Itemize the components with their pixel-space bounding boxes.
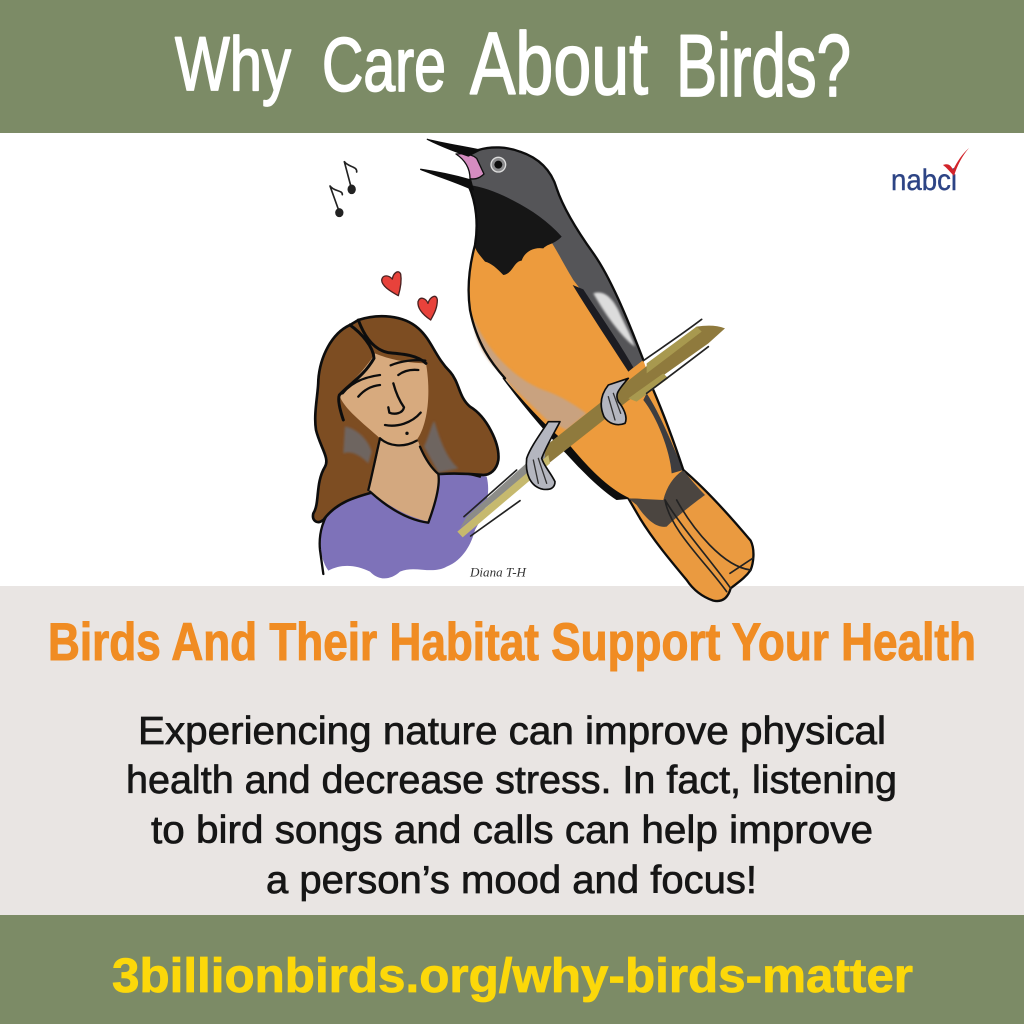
body text: health and decrease stress. In fact, listening (126, 759, 897, 802)
body text: a person’s mood and focus! (266, 859, 757, 902)
tail (628, 470, 753, 601)
eye (491, 157, 506, 172)
facial features (343, 360, 425, 445)
undertail black band (503, 378, 628, 499)
logo: nabci (891, 148, 969, 197)
illustration: woman listening to singing oriole (313, 139, 753, 601)
oriole bird (421, 139, 753, 601)
wing streak (573, 285, 633, 372)
upper beak (427, 139, 480, 156)
body outline (468, 147, 683, 470)
header band (0, 0, 1024, 133)
artist signature: Diana T-H (469, 566, 527, 580)
neck (368, 438, 439, 522)
title: About (470, 14, 648, 113)
shirt outline (320, 473, 480, 574)
wing white patch (593, 292, 635, 347)
shirt (321, 474, 488, 578)
title: Birds? (676, 16, 851, 115)
back grey (467, 148, 643, 372)
woman (313, 316, 498, 578)
title (175, 14, 851, 115)
face (339, 353, 428, 445)
body text: to bird songs and calls can help improve (151, 809, 873, 852)
logo checkmark (943, 148, 969, 176)
hair (313, 316, 498, 522)
perch branch (457, 319, 725, 537)
beauty mark (405, 432, 409, 435)
neckline (368, 438, 439, 523)
tail feather lines (665, 500, 753, 592)
undertail dark patch (628, 470, 705, 527)
open mouth (456, 154, 484, 179)
body (469, 148, 683, 500)
hair part and bangs (339, 320, 426, 420)
title: Care (322, 23, 446, 108)
text panel background (0, 586, 1024, 915)
footer band (0, 915, 1024, 1024)
body text: Experiencing nature can improve physical (138, 710, 886, 753)
lower beak (421, 169, 473, 190)
bird foot, lower (526, 422, 560, 489)
icon: music notes (330, 162, 357, 216)
black throat (469, 185, 562, 275)
icon: hearts (382, 272, 437, 320)
logo wordmark: nabci (891, 164, 957, 197)
footer url: 3billionbirds.org/why-birds-matter (112, 950, 913, 1003)
hair shadow (343, 422, 458, 473)
bird foot, upper (601, 378, 628, 425)
body text (126, 710, 897, 902)
belly shading (473, 317, 587, 430)
lower back stripe (643, 393, 683, 473)
title: Why (175, 22, 291, 107)
